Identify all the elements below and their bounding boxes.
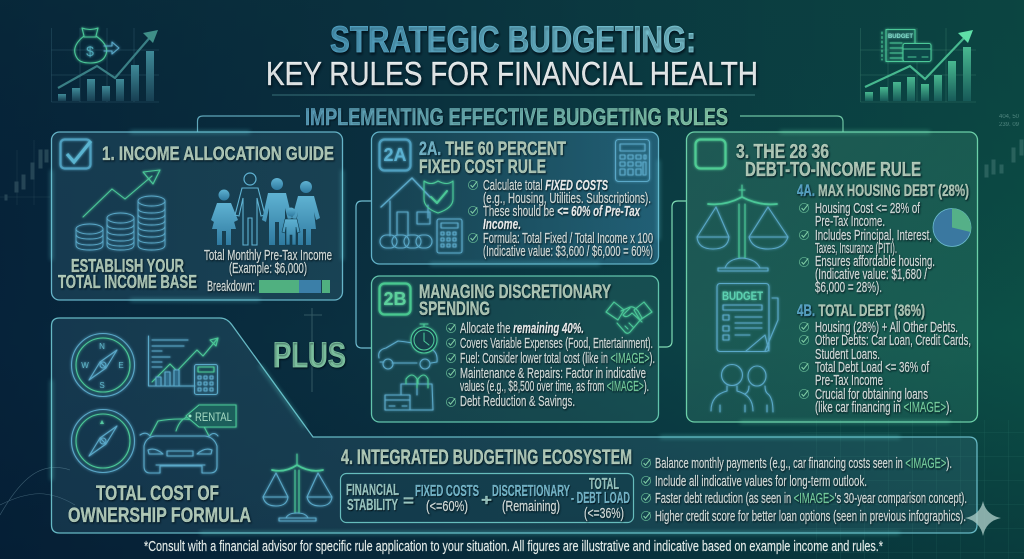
heading: FIXED COST RULE [419, 157, 546, 178]
heading [419, 282, 611, 320]
icon: coin stacks with growth arrow [76, 170, 165, 250]
icon: compass north [72, 334, 134, 396]
icon: car with rental tag [140, 405, 236, 473]
formula box: + [481, 492, 492, 509]
4B heading: 4B. TOTAL DEBT (36%) [797, 301, 925, 320]
icon: budget document [717, 284, 778, 352]
4A bullet list: $6,000 = 28%). [815, 280, 882, 296]
formula box: TOTAL [589, 476, 619, 493]
heading: SPENDING [419, 299, 490, 320]
connector lines [198, 116, 843, 348]
icon: budget document and chart [860, 28, 976, 102]
heading [736, 141, 921, 181]
formula box: FINANCIAL [346, 482, 399, 499]
formula box: DISCRETIONARY [492, 483, 570, 500]
icon: handshake [606, 302, 652, 333]
text: monthly income example [204, 248, 332, 277]
4B bullet list: Crucial for obtaining loans [815, 387, 928, 403]
heading: total cost of ownership formula: OWNERSHIP FORMULA [68, 503, 251, 527]
panel: income allocation guide [52, 132, 342, 300]
bullet list: (Indicative value: $3,600 / $6,000 = 60%) [483, 244, 653, 260]
bullet list: Fuel: Consider lower total cost (like in <IMAGE>). [460, 351, 655, 367]
pie chart [933, 208, 971, 246]
icon: money bag and growth chart [52, 28, 159, 102]
formula box: STABILITY [347, 497, 398, 514]
formula box: - DEBT LOAD [571, 490, 630, 507]
4A bullet list: Ensures affordable housing. [815, 254, 935, 270]
bullet list: Covers Variable Expenses (Food, Entertainment). [460, 336, 653, 352]
bullet list: ecosystem [641, 456, 967, 525]
bullet list: values (e.g., $8,500 over time, as from <IMAGE>). [460, 379, 649, 395]
4A bullet list: (Indicative value: $1,680 / [815, 267, 928, 283]
badge 2A [380, 140, 410, 170]
icon: car with rental tag: RENTAL [195, 412, 232, 424]
bullet list: Debt Reduction & Savings. [460, 394, 575, 410]
bullet list: (e.g., Housing, Utilities. Subscriptions). [483, 191, 651, 207]
4B bullet list [799, 320, 971, 416]
4B bullet list: (like car financing in <IMAGE>). [815, 400, 952, 416]
icon: balance scale [697, 185, 788, 271]
icon: two people [711, 364, 773, 412]
label: establish income base: ESTABLISH YOUR [71, 256, 184, 276]
4A bullet list: Pre-Tax Income. [815, 214, 885, 230]
title: STRATEGIC BUDGETING: [330, 19, 696, 60]
label: establish income base: TOTAL INCOME BASE [58, 272, 197, 292]
heading: integrated ecosystem: 4. INTEGRATED BUDGETING ECOSYSTEM [341, 446, 632, 469]
4B bullet list: Pre-Tax Income [815, 373, 883, 389]
4B bullet list: Housing (28%) + All Other Debts. [815, 320, 958, 336]
4B bullet list: Student Loans. [815, 347, 880, 363]
bullet list: Allocate the remaining 40%. [460, 321, 584, 337]
panel: 2A fixed cost rule [372, 132, 658, 264]
icon: balance scale small [263, 454, 332, 521]
icon: budget document and chart: BUDGET [888, 33, 913, 40]
bullet list [446, 321, 655, 410]
title: KEY RULES FOR FINANCIAL HEALTH [266, 55, 758, 92]
subtitle: IMPLEMENTING EFFECTIVE BUDGETING RULES [305, 104, 728, 131]
icon: sparkle [965, 501, 1001, 536]
badge 2A: 2A [383, 145, 407, 165]
bullet list [468, 178, 653, 260]
heading: 3. THE 28 36 [736, 141, 829, 163]
bullet list: Formula: Total Fixed / Total Income x 100 [483, 231, 653, 247]
heading: total cost of ownership formula: TOTAL COST OF [96, 481, 219, 505]
heading: total cost of ownership formula [68, 481, 251, 527]
4A bullet list: Includes Principal, Interest, [815, 228, 932, 244]
icon: compass second [72, 410, 134, 472]
formula box: (<=60%) [426, 499, 468, 515]
bullet list: Income. [483, 217, 521, 233]
icon: checkbox [60, 140, 91, 168]
heading: DEBT-TO-INCOME RULE [745, 159, 921, 181]
heading: MANAGING DISCRETIONARY [419, 282, 611, 303]
heading: 1. INCOME ALLOCATION GUIDE [102, 143, 334, 165]
heading: 2A. THE 60 PERCENT [419, 139, 566, 160]
icon: compass north: W [81, 361, 89, 370]
background: 404, 50 [999, 114, 1020, 120]
heading [419, 139, 566, 178]
background: 239. 09 [999, 122, 1020, 128]
panel: 2B discretionary spending [372, 276, 658, 422]
icon: family [211, 173, 320, 245]
formula box: (Remaining) [502, 499, 560, 515]
icon: budget document: BUDGET [722, 291, 763, 303]
formula box: (<=36%) [584, 506, 624, 522]
icon: calculator [616, 140, 650, 182]
icon: car and stopwatch [379, 324, 437, 369]
4A bullet list [799, 201, 935, 296]
icon: money bag and growth chart: $ [86, 43, 94, 59]
icon: shopping bags and card [385, 375, 433, 410]
bullet list: ecosystem: Include all indicative values for long-term outlook. [655, 474, 867, 490]
bullet list: Maintenance & Repairs: Factor in indicative [460, 366, 646, 382]
text: monthly income example: (Example: $6,000) [229, 261, 307, 277]
icon: compass north: N [99, 342, 105, 351]
title [266, 19, 758, 95]
formula box: = [403, 493, 414, 510]
plus sign label [273, 308, 346, 392]
icon: compass north: E [118, 361, 124, 370]
checkbox [696, 140, 726, 168]
4A bullet list: Housing Cost <= 28% of [815, 201, 921, 217]
label: establish income base [58, 256, 197, 292]
icon: compass north: S [99, 381, 105, 390]
plus sign label: PLUS [273, 336, 346, 375]
panel: integrated budgeting ecosystem and total cost of ownership [52, 318, 977, 533]
text: monthly income example: Total Monthly Pre-Tax Income [204, 248, 332, 264]
formula box: FIXED COSTS [415, 483, 479, 500]
icon: house, shield and chain [380, 178, 462, 253]
icon: report chart with calculator [148, 336, 218, 394]
formula box [340, 474, 634, 522]
bullet list: Calculate total FIXED COSTS [483, 178, 608, 194]
badge 2B: 2B [383, 289, 407, 309]
breakdown bar [207, 279, 330, 295]
4A bullet list: Taxes, Insurance (PITI). [815, 241, 897, 257]
panel: debt-to-income rule [686, 132, 978, 422]
breakdown bar: Breakdown: [207, 279, 255, 295]
bullet list: These should be <= 60% of Pre-Tax [483, 204, 641, 220]
4B bullet list: Total Debt Load <= 36% of [815, 360, 930, 376]
badge 2B [380, 284, 410, 314]
